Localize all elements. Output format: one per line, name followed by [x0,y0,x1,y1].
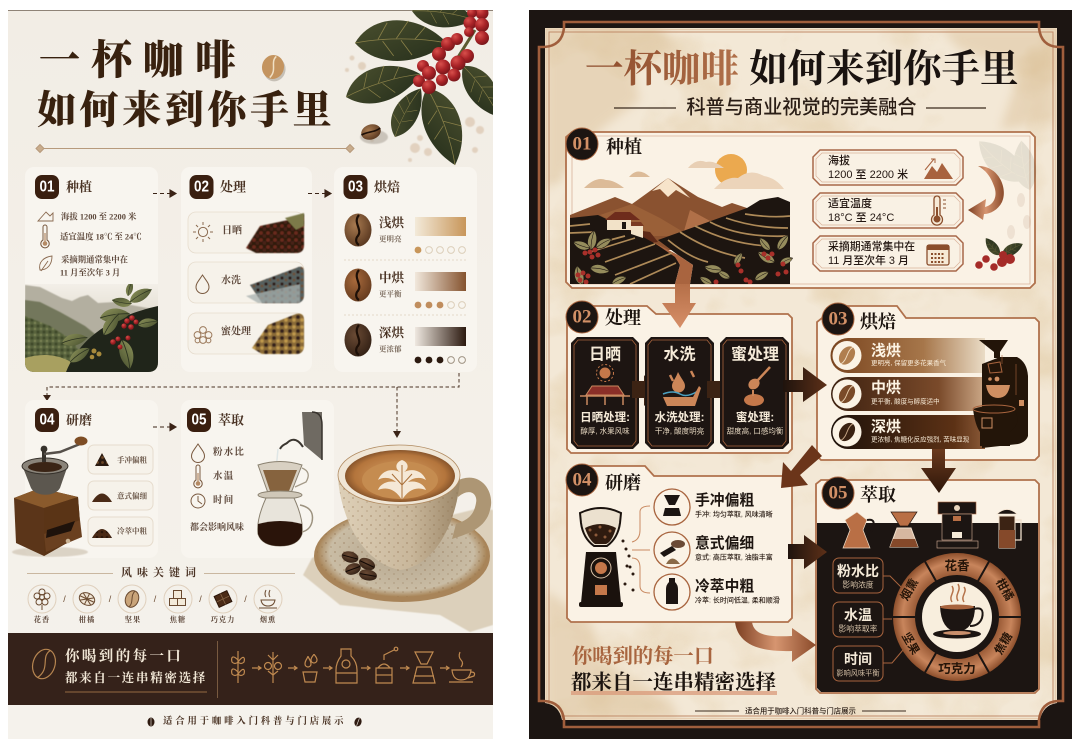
saucer [314,509,490,602]
chart: flavor wheel: 花香 [944,558,970,573]
arrow: 日晒 to 水洗 [632,375,658,406]
icon: sugar cubes [170,590,186,606]
icons: journey from plant to cup [232,647,475,683]
chip: cold brew medium grind: 冷萃中粗 [117,526,147,536]
French press [997,510,1021,548]
card: washed: 干净, 酸度明亮 [655,426,705,436]
row: light roast: 浅烘 [871,342,901,360]
heading: 研磨: 研磨 [66,412,92,428]
row: medium roast [831,377,985,411]
panel: 02 processing [181,167,312,372]
section: flavor keywords: 花香 [34,615,50,624]
heading: 处理: 处理 [605,308,641,328]
illustration: terraced coffee farm [570,154,794,287]
chart: flavor wheel [893,553,1021,681]
step badge 01 [35,175,59,199]
coffee beans on saucer [340,549,378,582]
info: harvest: 11 月至次年 3 月 [828,253,909,267]
text: closing lines [65,647,207,685]
row: medium roast: 更平衡, 酸度与醇度适中 [871,396,940,406]
item: cold brew medium: 冷萃: 长时间低温, 柔和顺滑 [695,596,780,604]
factor: 粉水比: 影响浓度 [842,580,874,590]
row: dark roast [344,315,467,363]
subtitle with rules: 科普与商业视觉的完美融合 [686,96,917,118]
text: closing statement [571,645,777,695]
decoration: grounds and connectors [622,540,634,592]
band: closing message [8,633,493,705]
row: dark roast: 深烘 [871,418,901,436]
step badge 05: 05 [192,412,207,428]
chart: flavor wheel: 坚果 [899,630,923,657]
card: honey: 蜜处理: [736,410,774,424]
item: water temperature: 水温 [213,470,234,482]
text: all affect flavor: 都会影响风味 [190,521,244,532]
footer: usage note: 适合用于咖啡入门科普与门店展示 [745,706,856,716]
icon: honey dipper [744,367,770,406]
heading: 种植: 种植 [66,180,92,194]
step badge 04 [566,464,598,496]
latte art [345,450,455,502]
card: sun-dried: 日晒 [589,346,621,364]
footer: usage note [148,715,363,727]
panel: 01 planting [25,167,158,372]
card: sun-dried: 日晒 [222,224,242,236]
chip: pour-over coarse grind: 手冲偏粗 [117,454,147,464]
icon: sun and drying bed [580,364,630,405]
icon: floating coffee bean near title [262,55,286,82]
text: harvest [60,254,129,278]
arrow: 02 to 03 [308,190,331,197]
illustration: latte cup on saucer [303,445,493,632]
chart: flavor wheel: 巧克力 [938,661,976,676]
section: flavor keywords: 烟熏 [259,615,276,624]
heading: 处理: 处理 [220,180,246,194]
info: temperature: 适宜温度 [828,196,872,210]
row: medium roast [344,260,467,308]
ornamental copper border [539,22,1063,727]
section: flavor keywords: 焦糖 [170,615,186,624]
icon: water tank [663,371,701,406]
illustration: coffee cherries [975,235,1025,271]
arrow: 水洗 to 蜜处理 [707,375,733,406]
row: light roast: 更明亮, 保留更多花果香气 [871,358,947,367]
row: dark roast [831,415,985,449]
step badge 01: 01 [40,178,55,196]
item: espresso fine: 意式偏细 [695,534,754,552]
moka pot [843,512,874,548]
card: sun-dried: 日晒处理: [580,410,630,424]
outer dark frame [529,10,1072,739]
arrow: 01 to 02 [153,190,176,197]
step badge 03 [822,303,854,335]
item: time: 时间 [213,494,234,506]
text: closing lines: 都来自一连串精密选择 [65,670,207,685]
info: altitude: 海拔 [828,153,850,167]
arrow: roasting to grinding [781,445,822,488]
step badge 02 [566,301,598,333]
section: flavor keywords: / [63,594,66,604]
text: harvest: 采摘期通常集中在 [61,254,129,264]
cup handle [452,478,491,539]
cup body [338,445,460,570]
section: flavor keywords: / [109,594,112,604]
item: pour-over coarse [654,489,773,525]
row: light roast: 浅烘 [379,215,406,230]
icon: outline bean [29,646,59,682]
info: altitude: 1200 至 2200 米 [828,167,908,181]
step badge 01 [566,128,598,160]
title: 一杯咖啡 如何来到你手里: 一杯咖啡 [585,48,739,91]
card: honey [188,313,304,354]
espresso machine [937,502,978,548]
item: water temperature [194,465,234,488]
icon: mountain [38,212,53,221]
section: flavor keywords [27,565,295,624]
text: closing lines: 你喝到的每一口 [65,647,183,665]
poster: minimalist coffee journey (left) [7,0,511,739]
item: cold brew medium [654,574,780,610]
step badge 05: 05 [828,482,848,504]
item: coffee-to-water ratio: 粉水比 [213,446,245,458]
text: closing statement: 都来自一连串精密选择 [571,670,776,694]
text: harvest: 11 月至次年 3 月 [60,268,120,278]
illustration: roaster machine [973,340,1028,448]
card: washed [188,262,304,303]
title: 一杯咖啡 如何来到你手里: 一杯咖啡 [39,37,247,83]
factor: 时间: 影响风味平衡 [836,668,880,678]
text: closing statement: 你喝到的每一口 [572,645,714,668]
illustration: hand grinder [12,436,88,557]
poster: vintage coffee journey (right) [529,10,1072,739]
step badge 04: 04 [572,470,592,490]
icon: leaf [40,256,52,271]
panel: 02 processing [566,284,792,453]
card: sun-dried [188,212,304,253]
icon: chocolate [214,591,232,607]
card: washed: 水洗处理: [655,410,704,424]
section: flavor keywords: 坚果 [125,615,141,624]
factor: 水温 [833,602,883,637]
step badge 05 [187,408,211,432]
heading: 种植: 种植 [606,136,642,157]
illustration: gooseneck kettle and pour-over set [258,412,322,546]
item: pour-over coarse: 手冲偏粗 [695,491,754,509]
row: light roast [344,214,466,253]
card: honey: 蜜处理 [221,324,251,338]
title: 一杯咖啡 如何来到你手里 [585,48,1019,91]
chip: espresso fine grind [88,481,153,510]
row: dark roast: 深烘 [379,325,406,340]
arrow: curved copper [968,166,1004,220]
factor: 时间: 时间 [844,651,872,667]
item: cold brew medium: 冷萃中粗 [695,577,754,595]
panel: 01 planting [566,128,1040,288]
title divider [36,144,354,152]
card: washed [645,337,714,449]
arrow: grinding curved to extraction [735,622,816,662]
pour-over [890,512,918,547]
card: washed: 水洗 [663,346,696,364]
napkin [303,508,493,632]
title: 一杯咖啡 如何来到你手里 [37,37,335,132]
heading: 萃取: 萃取 [218,412,244,428]
heading: 烘焙: 烘焙 [373,180,400,194]
heading: 风味关键词: 风味关键词 [121,565,201,579]
icon: coffee cup with steam [933,584,983,638]
section: flavor keywords: / [199,594,202,604]
card: honey: 甜度高, 口感均衡 [727,426,784,436]
item: espresso fine: 意式: 高压萃取, 油脂丰富 [695,552,773,562]
section: flavor keywords: / [154,594,157,604]
row: medium roast: 中烘 [379,270,406,285]
illustration: coffee mountain landscape [25,281,158,372]
row: light roast [830,338,985,373]
title: 一杯咖啡 如何来到你手里: 如何来到你手里 [37,90,335,132]
chart: flavor wheel: 焦糖 [991,630,1015,657]
panel: 04 grinding [12,400,158,558]
chip: cold brew medium grind [88,517,153,546]
step badge 04: 04 [40,412,55,428]
card: washed: 水洗 [221,274,241,286]
heading: 萃取: 萃取 [860,485,896,505]
section: flavor keywords: / [244,594,247,604]
card: honey [720,337,789,449]
factor: 粉水比: 粉水比 [837,563,879,579]
heading: 烘焙: 烘焙 [859,312,896,332]
parchment background [545,28,1057,720]
title: 一杯咖啡 如何来到你手里: 如何来到你手里 [749,48,1019,91]
icon: nut [123,589,141,609]
step badge 02: 02 [572,306,592,328]
item: pour-over coarse: 手冲: 均匀萃取, 风味清晰 [695,510,773,518]
section: flavor keywords: 柑橘 [79,615,95,624]
row: dark roast: 更浓郁 [379,344,402,354]
icon: thermometer [41,225,49,248]
info: altitude [813,150,963,185]
row: medium roast: 中烘 [871,380,901,396]
icon: roasted bean near branch [359,122,388,144]
info: temperature [813,193,963,228]
text: temperature: 适宜温度 18℃ 至 24℃ [60,232,142,242]
illustration: electric grinder [579,508,623,607]
item: espresso fine [654,532,773,568]
chart: flavor wheel: 柑橘 [993,576,1017,603]
step badge 02 [190,175,214,199]
arrow: plant to processing [662,284,696,328]
arrow: roasting to extraction [921,449,956,493]
step badge 01: 01 [572,134,592,154]
factor: 水温: 影响萃取率 [839,624,878,634]
panel: 05 extraction [735,449,1039,693]
chip: espresso fine grind: 意式偏细 [117,490,147,500]
heading: 研磨: 研磨 [605,472,641,493]
info: temperature: 18°C 至 24°C [828,212,894,224]
chart: flavor wheel: 烟熏 [897,576,921,603]
arrow: 04 to 05 [153,424,176,430]
row: medium roast: 更平衡 [379,288,402,298]
section: flavor keywords: 巧克力 [211,615,235,624]
factor: 时间 [833,646,883,681]
faint leaves watermark [969,132,1040,239]
panel: 05 extraction [187,408,323,546]
panel: 03 roasting [783,303,1039,460]
icon: flower [34,589,50,610]
step badge 03: 03 [348,178,363,196]
factor: 水温: 水温 [844,607,872,623]
item: time [191,494,234,508]
illustration: coffee branch with red cherries [344,10,493,166]
row: light roast: 更明亮 [379,234,402,244]
info: harvest: 采摘期通常集中在 [828,239,915,253]
icon: smoky cup [259,590,277,608]
arrow: processing to roasting [783,367,827,402]
row: dark roast: 更浓郁, 焦糖化反应强烈, 苦味显现 [871,434,970,444]
card: sun-dried [571,337,639,449]
panel: 03 roasting [334,167,477,372]
card: honey: 蜜处理 [731,344,779,364]
factor: 粉水比 [833,558,883,593]
icon: citrus [77,590,97,608]
step badge 03 [344,175,368,199]
panel: 04 grinding [566,445,822,622]
card: sun-dried: 醇厚, 水果风味 [580,426,630,436]
text: altitude: 海拔 1200 至 2200 米 [61,212,137,222]
step badge 04 [35,408,59,432]
footer: usage note: 适合用于咖啡入门科普与门店展示 [163,715,346,727]
chip: pour-over coarse grind [88,445,153,474]
step badge 05 [822,477,854,509]
icons: brewing tools [843,502,1021,548]
arrow: dashed route to 04 and cup [43,373,459,438]
arrow: grinding to extraction [788,535,827,569]
item: coffee-to-water ratio [192,444,245,462]
info: harvest [813,236,963,271]
step badge 03: 03 [828,308,848,330]
step badge 02: 02 [194,178,209,196]
